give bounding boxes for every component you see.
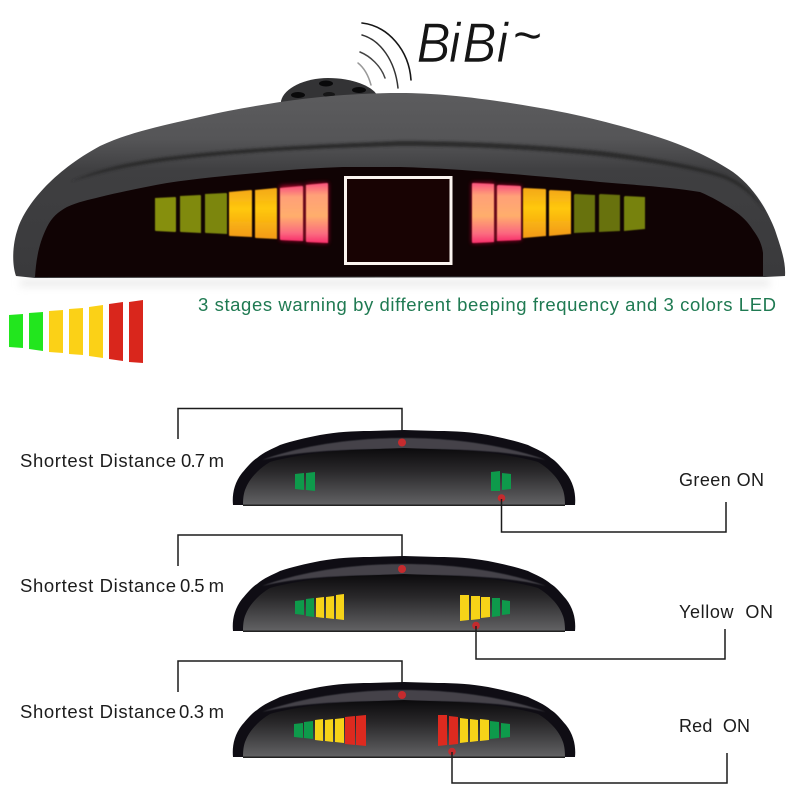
sensor dot LED — [448, 748, 456, 755]
LEDs left — [294, 715, 366, 746]
main display unit — [13, 78, 785, 287]
green LEDs left — [295, 472, 315, 491]
distance label 0.7 m: Shortest Distance — [20, 450, 176, 471]
distance label 0.5 m: Shortest Distance — [20, 575, 176, 596]
caption: 3 stages warning: 3 stages warning by different beeping frequency and 3 colors LED — [198, 294, 776, 315]
distance label 0.5 m: 0.5 m — [180, 575, 224, 596]
status label green: Green ON — [679, 470, 764, 490]
speaker mount — [281, 78, 377, 104]
sensor dot LED — [472, 622, 480, 629]
small device 1 — [233, 430, 575, 506]
row 2: 0.5 m yellow — [20, 535, 773, 659]
left LED bar — [155, 183, 328, 243]
BiBi heading: BiBi~ — [417, 5, 542, 75]
central digit window — [346, 178, 451, 264]
status label yellow: Yellow ON — [679, 602, 773, 622]
distance label 0.3 m: Shortest Distance — [20, 701, 176, 722]
distance label 0.7 m: 0.7 m — [181, 450, 224, 471]
sound waves icon — [358, 23, 411, 88]
connector to shell — [178, 408, 402, 441]
row 3: 0.3 m red — [20, 661, 750, 783]
status label red: Red ON — [679, 716, 750, 736]
small device 2 — [233, 556, 575, 632]
sensor dot top — [398, 565, 406, 573]
display screen — [35, 167, 763, 277]
small device 3 — [233, 682, 575, 758]
connector to green label — [502, 499, 726, 532]
connector to yellow label — [476, 626, 725, 659]
connector to shell — [178, 535, 402, 568]
shell ridge — [70, 141, 765, 212]
LEDs right — [438, 715, 510, 746]
LEDs right — [460, 595, 510, 621]
LEDs left — [295, 594, 344, 620]
colour legend bars — [9, 300, 143, 363]
right LED bar — [472, 183, 645, 243]
device shadow — [20, 279, 770, 287]
sensor dot top — [398, 438, 406, 446]
row 1: 0.7 m green — [20, 408, 764, 532]
distance label 0.3 m: 0.3 m — [179, 701, 224, 722]
green LEDs right — [491, 471, 511, 491]
connector to red label — [452, 752, 727, 783]
sensor dot top — [398, 691, 406, 699]
sensor dot LED — [498, 494, 505, 502]
connector to shell — [178, 661, 402, 694]
outer shell — [13, 93, 785, 278]
